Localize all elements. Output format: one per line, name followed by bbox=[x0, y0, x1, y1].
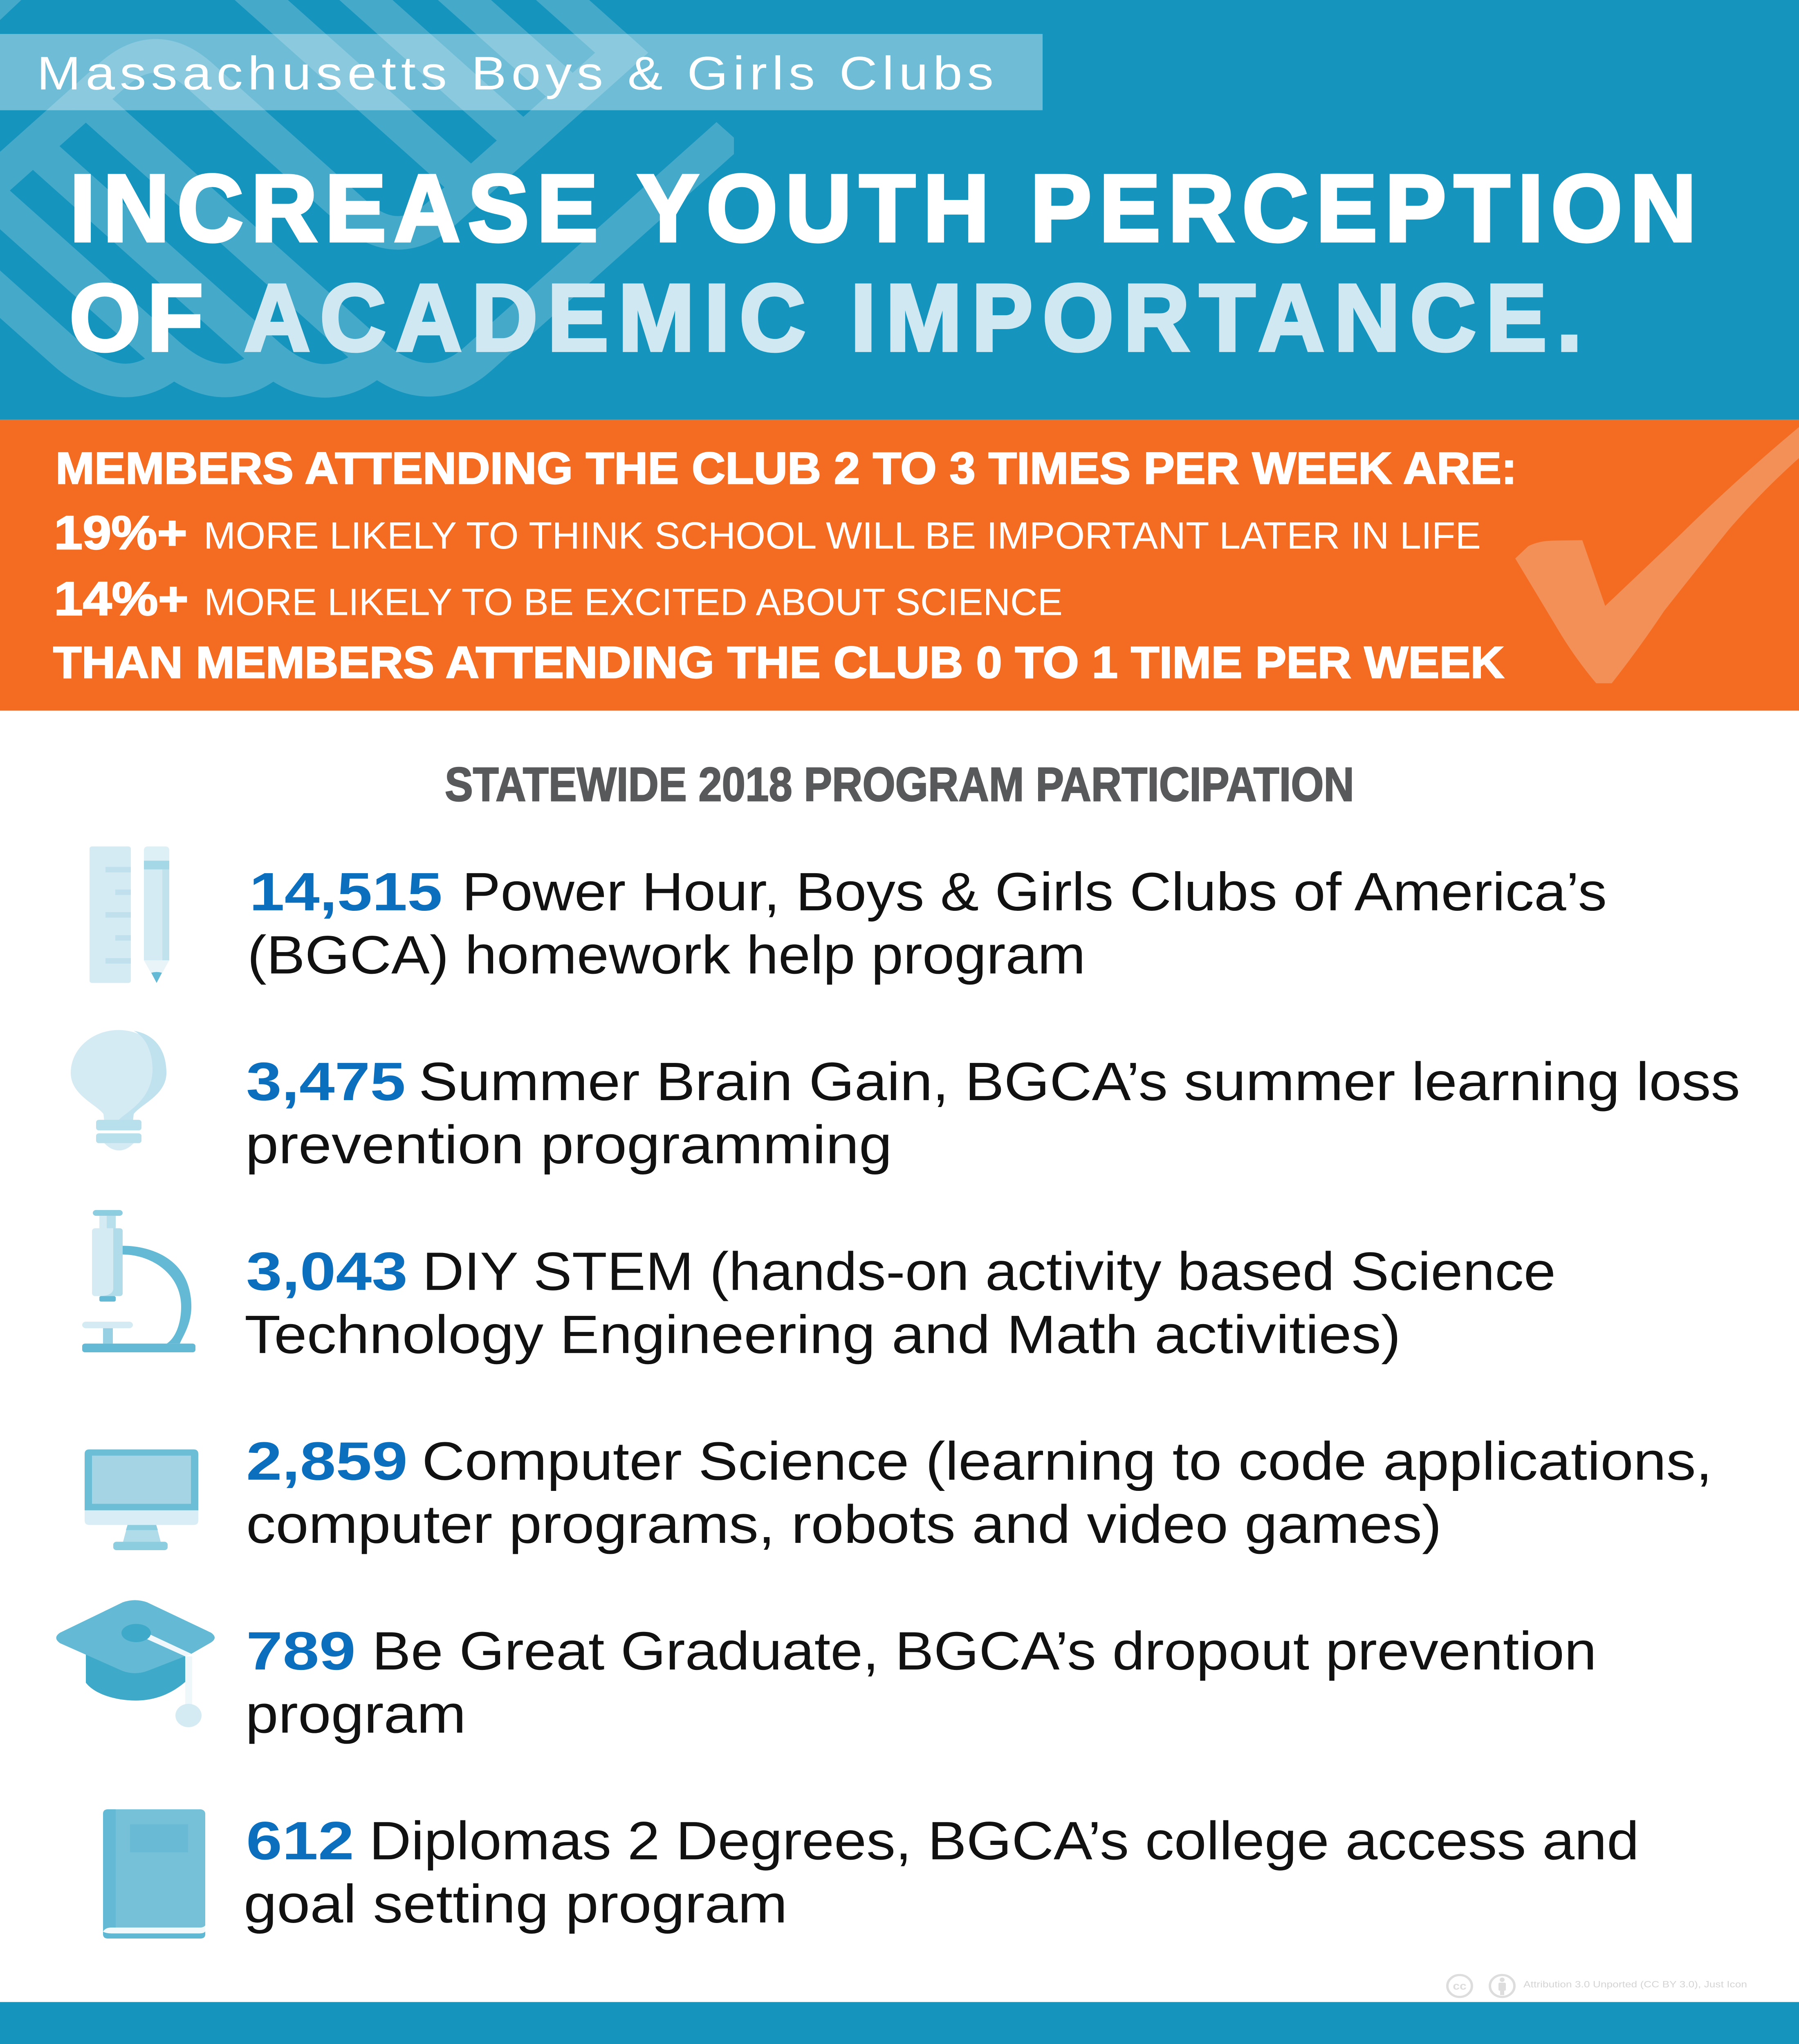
footer bar bbox=[0, 2002, 1799, 2044]
title: INCREASE YOUTH PERCEPTION bbox=[70, 155, 1696, 261]
program row: DIY STEM: 3,043 bbox=[246, 1241, 408, 1302]
icon credit: cc bbox=[1453, 1980, 1467, 1992]
program row: Summer Brain Gain: 3,475 bbox=[246, 1051, 406, 1112]
panel: orange key findings bbox=[0, 420, 1799, 710]
program row: DIY STEM bbox=[245, 1241, 1556, 1365]
program row: Be Great Graduate: Be Great Graduate, BGCA’s dropout prevention bbox=[372, 1620, 1597, 1681]
program row: Computer Science bbox=[246, 1431, 1712, 1554]
program row: DIY STEM: Technology Engineering and Math activities) bbox=[245, 1304, 1401, 1365]
finding heading: MEMBERS ATTENDING THE CLUB 2 TO 3 TIMES PER WEEK ARE: bbox=[56, 443, 1517, 493]
finding comparison line: THAN MEMBERS ATTENDING THE CLUB 0 TO 1 TIME PER WEEK bbox=[53, 637, 1504, 688]
program row: Summer Brain Gain: Summer Brain Gain, BGCA’s summer learning loss bbox=[419, 1051, 1740, 1112]
icon: check mark bbox=[1515, 427, 1799, 683]
icon credit: Attribution 3.0 Unported (CC BY 3.0), Just Icon bbox=[1523, 1980, 1747, 1990]
program row: Be Great Graduate bbox=[245, 1620, 1597, 1744]
program row: Power Hour: Power Hour, Boys & Girls Clubs of America’s bbox=[462, 861, 1607, 922]
finding: 14 percent bbox=[54, 572, 1063, 625]
program row: Be Great Graduate: 789 bbox=[246, 1620, 356, 1681]
icon: ruler and pencil bbox=[90, 847, 169, 983]
program row: Summer Brain Gain bbox=[245, 1051, 1740, 1175]
icon: microscope bbox=[82, 1210, 195, 1352]
finding: 14 percent: MORE LIKELY TO BE EXCITED ABOUT SCIENCE bbox=[204, 581, 1063, 623]
organisation band: Massachusetts Boys & Girls Clubs bbox=[37, 47, 994, 99]
program row: Power Hour: 14,515 bbox=[249, 861, 442, 922]
program row: Diplomas 2 Degrees: goal setting program bbox=[244, 1874, 787, 1934]
program row: Be Great Graduate: program bbox=[245, 1684, 466, 1744]
program row: Diplomas 2 Degrees bbox=[244, 1811, 1639, 1934]
panel: header bbox=[0, 0, 1799, 420]
program row: Computer Science: Computer Science (learning to code applications, bbox=[422, 1431, 1712, 1491]
section heading: STATEWIDE 2018 PROGRAM PARTICIPATION bbox=[445, 758, 1354, 811]
icon credit bbox=[1447, 1975, 1747, 1997]
program row: Power Hour: (BGCA) homework help program bbox=[247, 925, 1086, 985]
finding: 14 percent: 14%+ bbox=[54, 572, 188, 625]
program row: Diplomas 2 Degrees: Diplomas 2 Degrees, BGCA’s college access and bbox=[369, 1811, 1639, 1871]
program row: Computer Science: computer programs, robots and video games) bbox=[246, 1494, 1442, 1554]
organisation band bbox=[0, 34, 1043, 110]
finding: 19 percent: MORE LIKELY TO THINK SCHOOL WILL BE IMPORTANT LATER IN LIFE bbox=[204, 514, 1481, 557]
program row: DIY STEM: DIY STEM (hands-on activity based Science bbox=[422, 1241, 1556, 1302]
icon: book bbox=[103, 1809, 205, 1939]
program row: Diplomas 2 Degrees: 612 bbox=[246, 1811, 354, 1871]
icon: light bulb bbox=[71, 1030, 166, 1150]
icon: computer monitor bbox=[85, 1450, 198, 1550]
title bbox=[70, 155, 1696, 371]
program row: Power Hour bbox=[247, 861, 1607, 985]
title: OF bbox=[70, 265, 203, 371]
program row: Summer Brain Gain: prevention programming bbox=[245, 1114, 892, 1175]
finding: 19 percent bbox=[54, 506, 1481, 559]
logo watermark bbox=[0, 0, 730, 381]
icon: graduation cap bbox=[56, 1600, 215, 1727]
program row: Computer Science: 2,859 bbox=[246, 1431, 408, 1491]
finding: 19 percent: 19%+ bbox=[54, 506, 187, 559]
title: ACADEMIC IMPORTANCE. bbox=[244, 265, 1582, 371]
